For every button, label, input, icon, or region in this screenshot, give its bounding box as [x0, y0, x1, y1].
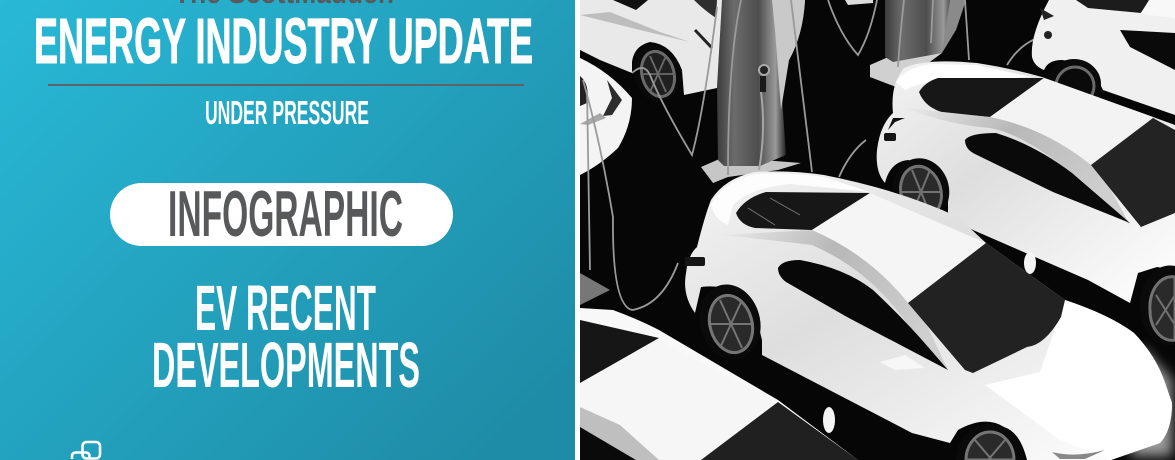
heading: EV recent developments: DEVELOPMENTS [152, 329, 420, 401]
charging station: centre [845, 0, 966, 87]
car: bottom left [580, 308, 858, 460]
badge: infographic pill: INFOGRAPHIC [168, 177, 403, 250]
icon: logo overlapping squares [72, 442, 100, 459]
car: top right [1032, 0, 1175, 115]
car: right, upper row [877, 61, 1175, 346]
car: centre foreground [685, 171, 1172, 460]
subheading: under pressure: UNDER PRESSURE [205, 94, 369, 131]
panel: teal title panel [0, 0, 575, 460]
mirror: right car [1024, 252, 1036, 274]
heading: EV recent developments [152, 272, 420, 401]
heading: EV recent developments: EV RECENT [195, 272, 376, 344]
badge: infographic pill [110, 177, 453, 250]
glow around front car [1130, 345, 1172, 456]
car: left side [580, 58, 632, 175]
heading: energy industry update: ENERGY INDUSTRY UPDATE [34, 5, 533, 77]
charging station: left [701, 0, 805, 183]
car: top left [580, 0, 805, 107]
panel: electric cars charging photo [580, 0, 1175, 460]
white separator strip [575, 0, 580, 460]
charging cables [583, 0, 1048, 310]
charging base: lower left [580, 273, 610, 305]
divider line [48, 84, 524, 86]
